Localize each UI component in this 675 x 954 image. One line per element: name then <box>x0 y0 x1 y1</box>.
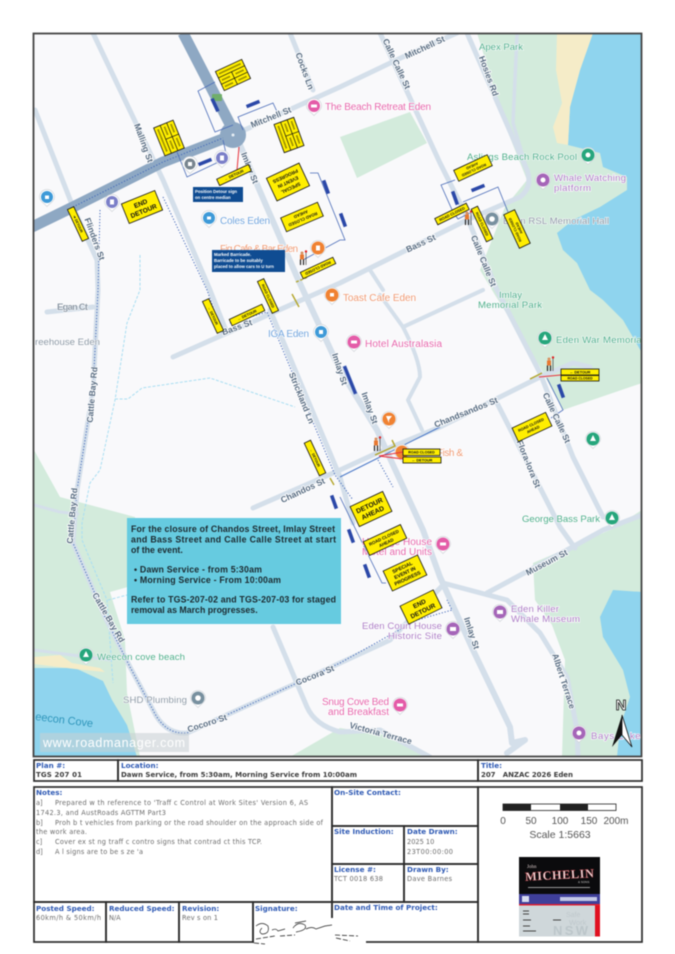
licence card: John <box>527 865 537 870</box>
place names: Apex Park <box>479 42 523 53</box>
license: TCT 0018 638 <box>333 875 383 883</box>
callout: closure information: removal as March progresses. <box>131 605 258 615</box>
place names: SHD Plumbing <box>123 695 187 706</box>
street names: Cattle Bay Rd <box>90 591 127 644</box>
sign: detour ahead: AHEAD <box>361 505 386 522</box>
drawn by: Dave Barnes <box>407 875 453 883</box>
title block: title: Title: <box>481 761 502 770</box>
scale labels: 150 <box>581 816 598 827</box>
site induction <box>332 826 404 864</box>
place names: reehouse Eden <box>35 337 100 348</box>
sign: road closed ahead south <box>363 525 407 555</box>
place names: Coles Eden <box>220 216 270 227</box>
watermark: www.roadmanager.com <box>42 736 185 750</box>
sign: detour Flinders <box>67 207 89 241</box>
place names: The Beach Retreat Eden <box>325 102 431 113</box>
street names: Calle Calle St <box>541 391 573 445</box>
sign: road closed ahead Calle Calle: ROAD CLOSED <box>461 162 487 177</box>
title block: location: Dawn Service, from 5:30am, Morning Service from 10:00am <box>121 771 357 779</box>
street names: Strickland Ln <box>287 371 317 425</box>
sign: detour Flinders: ➔ DETOUR <box>72 215 84 234</box>
sign: road closed Imlay: ROAD CLOSED <box>304 260 331 276</box>
date and time of project: Date and Time of Project: <box>334 903 438 912</box>
sign: special event in progress: EVENT IN <box>393 566 417 581</box>
sign: four-panel west <box>154 120 184 156</box>
highway shield <box>212 94 222 101</box>
scale labels: 100 <box>552 816 569 827</box>
sign: road closed ahead reversed <box>281 202 323 232</box>
revision: Revision: <box>182 904 219 913</box>
street names: Imlay St <box>330 352 350 386</box>
sign: four-panel north <box>215 59 251 91</box>
map pins <box>40 98 620 742</box>
place names: Whale Museum <box>511 614 580 625</box>
signature box <box>253 902 332 942</box>
barriers <box>292 277 542 485</box>
sign: detour Bass <box>229 304 265 326</box>
notes panel: the work area. <box>36 828 87 836</box>
street names: Chandos St <box>279 476 327 505</box>
sign: road closed ahead east: ROAD CLOSED <box>508 217 523 242</box>
sign: road closed ahead east: AHEAD <box>515 221 524 234</box>
notes panel <box>34 787 332 902</box>
sign: detour arrow Imlay: ← DETOUR <box>224 169 245 181</box>
street names: Mitchell St <box>403 34 446 61</box>
place names: Eden War Memorial <box>556 335 644 346</box>
reduced speed <box>106 902 179 942</box>
sign: road closed ahead Calle Calle east: ROAD CLOSED <box>518 417 545 433</box>
date drawn: Date Drawn: <box>407 827 458 836</box>
sign: road closed and detour, Chandos west: ← DETOUR <box>412 458 433 462</box>
sign: detour ahead: DETOUR <box>355 497 384 515</box>
signature <box>254 918 366 944</box>
note: position detour sign: Position Detour sign <box>195 189 237 194</box>
sign: special event in progress: SPECIAL <box>392 561 414 575</box>
place names: Weecon cove beach <box>97 652 185 663</box>
license: License #: <box>334 865 376 874</box>
callout: closure information: For the closure of Chandos Street, Imlay Street <box>131 524 335 534</box>
notes panel: d] <box>36 848 43 856</box>
place names: Whale Watching <box>554 173 626 184</box>
scale labels: 50 <box>525 816 537 827</box>
licence card: MICHELIN <box>525 866 594 884</box>
reduced speed: Reduced Speed: <box>109 904 175 913</box>
sign: detour and road closed, Chandos east: ← DETOUR <box>570 370 591 374</box>
sign: detour Strickland <box>304 440 326 476</box>
street names: Bass St <box>220 317 254 337</box>
scale labels: 0 <box>500 816 506 827</box>
street names: Mitchell St <box>249 104 293 130</box>
street names: Bass St <box>404 232 437 254</box>
road network <box>34 33 642 757</box>
note: position detour sign: on centre median <box>195 195 231 200</box>
notes panel: A l signs are to be s ze 'a <box>55 848 143 856</box>
scale labels: Scale 1:5663 <box>529 829 591 841</box>
notes panel: Cover ex st ng traff c contro signs that contrad ct this TCP. <box>55 838 262 846</box>
license <box>332 864 404 902</box>
north arrow: N <box>616 697 626 714</box>
north arrow <box>612 697 632 747</box>
posted speed: 60km/h & 50km/h <box>36 914 101 922</box>
highway <box>30 33 233 228</box>
traffic controllers <box>300 210 554 451</box>
title block: plan number: TGS 207 01 <box>36 771 82 779</box>
place names: Memorial Park <box>478 300 542 311</box>
posted speed: Posted Speed: <box>36 904 95 913</box>
sign: road closed Bass <box>257 279 279 313</box>
length tags <box>198 98 565 578</box>
sign: detour Bass: ← DETOUR <box>237 309 258 321</box>
title block: plan number <box>34 760 118 781</box>
water <box>34 33 642 757</box>
revision: Rev s on 1 <box>182 914 218 922</box>
place names: platform <box>554 183 591 194</box>
reduced speed: N/A <box>109 914 121 922</box>
sign: special event reversed: PROGRESS <box>271 167 299 184</box>
site induction: Site Induction: <box>334 827 394 836</box>
place names: Fish & <box>437 448 463 459</box>
sign: road closed Bass east <box>435 203 469 225</box>
sign: road closed ahead Calle Calle <box>454 155 492 181</box>
sign: special event in progress: PROGRESS <box>394 570 422 588</box>
callout: closure information: • Morning Service - From 10:00am <box>134 575 281 585</box>
detour route dotted <box>73 138 452 733</box>
map panel <box>30 33 646 757</box>
street names: Museum St <box>524 547 569 578</box>
street names: Chandsandos St <box>433 395 499 430</box>
sign: road closed ahead Calle Calle east <box>512 412 552 442</box>
drawn by: Drawn By: <box>407 865 449 874</box>
revision <box>179 902 253 942</box>
callout: closure information: Refer to TGS-207-02 and TGS-207-03 for staged <box>131 594 336 604</box>
sign: detour ahead <box>350 491 392 527</box>
date drawn: 2025 10 <box>407 838 434 846</box>
notes panel: a] <box>36 799 43 807</box>
place names: George Bass Park <box>522 514 600 525</box>
posted speed <box>34 902 106 942</box>
place names: Eden RSL Memorial Hall <box>503 216 609 227</box>
place names: Eden Killer <box>511 604 560 615</box>
scale bar <box>503 804 616 810</box>
street names: Malling St <box>132 122 156 164</box>
on-site contact: On-Site Contact: <box>334 788 401 797</box>
street names: Victoria Terrace <box>348 720 413 746</box>
sign: special event reversed: SPECIAL <box>280 180 301 195</box>
place names: Aslings Beach Rock Pool <box>467 152 577 163</box>
roundabout <box>220 122 246 148</box>
signature box: Signature: <box>255 904 298 913</box>
date drawn: 23T00:00:00 <box>407 848 453 856</box>
scale labels: 200m <box>603 816 629 827</box>
sign: four-panel east <box>274 117 304 153</box>
title block: plan number: Plan #: <box>36 761 65 770</box>
title block: title <box>478 760 642 781</box>
notes panel: 1742.3, and AustRoads AGTTM Part3 <box>36 809 166 817</box>
place names: Toast Cafe Eden <box>343 293 416 304</box>
licence card: Safe <box>566 912 581 919</box>
licence card <box>519 857 600 938</box>
place names: Imlay <box>499 290 522 301</box>
sign: end detour south <box>400 590 442 624</box>
map frame <box>34 34 642 756</box>
street names: Imlay St <box>462 616 482 650</box>
sign: road closed ahead east <box>504 210 530 248</box>
sign: special event reversed: EVENT IN <box>276 174 299 189</box>
sign: special event reversed <box>266 163 310 201</box>
sign: end detour west: DETOUR <box>130 203 158 220</box>
title block: location <box>118 760 478 781</box>
sign: end detour south: END <box>412 598 428 610</box>
place names: Snug Cove Bed <box>322 697 389 708</box>
drawn by <box>404 864 478 902</box>
sign: end detour west <box>121 191 163 223</box>
place names: Heritage House <box>362 537 432 548</box>
place names: Eden Court House <box>362 621 442 632</box>
note: marked barricade <box>212 250 285 272</box>
callout: closure information: • Dawn Service - from 5:30am <box>134 564 262 574</box>
note: marked barricade: Marked Barricade. <box>214 252 251 257</box>
sign: road closed ahead reversed: ROAD CLOSED <box>288 211 318 228</box>
scale labels <box>500 816 629 841</box>
scale panel <box>478 787 642 942</box>
sign: end detour west: END <box>133 198 149 210</box>
notes panel: c] <box>36 838 42 846</box>
sign: road closed and detour, Chandos west <box>403 449 441 463</box>
sign: special event in progress <box>383 555 427 591</box>
date drawn <box>404 826 478 864</box>
street names <box>65 34 578 746</box>
leader lines <box>177 82 563 583</box>
place names: and Breakfast <box>328 707 389 718</box>
sign: road closed ahead Calle Calle: AHEAD <box>465 161 479 170</box>
sign: end detour south: DETOUR <box>410 602 437 621</box>
sign: road closed Bass east: ROAD CLOSED <box>439 206 466 222</box>
on-site contact <box>332 787 478 826</box>
sign: road closed Calle Calle south <box>471 206 493 242</box>
sign: detour and road closed, Chandos east: ROAD CLOSED <box>567 377 593 381</box>
title block: location: Location: <box>121 761 159 770</box>
sign: road closed Bass: ROAD CLOSED <box>261 284 275 309</box>
street names: Flora-Iora St <box>515 439 543 489</box>
street names: Calle Calle St <box>381 37 413 91</box>
notes panel: b] <box>36 819 43 827</box>
place names: Hotel Australasia <box>365 339 442 350</box>
date and time of project <box>332 902 478 942</box>
street names: Cocks Ln <box>294 51 316 91</box>
callout: closure information <box>127 518 341 624</box>
place names: Egan Ct <box>57 302 89 313</box>
place names: Fig Cafe & Bar Eden <box>220 244 298 255</box>
street names: Hosies Rd <box>477 55 501 97</box>
note: marked barricade: placed to allow cars to U turn <box>214 264 274 269</box>
sign: road closed Imlay <box>300 257 336 279</box>
street names: Cattle Bay Rd <box>85 366 99 423</box>
street names: Cocora St <box>294 663 336 687</box>
sign: road closed Calle Calle south: ROAD CLOSED <box>475 212 489 237</box>
street names: Flinders St <box>83 216 107 262</box>
street names: Cocoro St <box>186 712 228 734</box>
callout: closure information: of the event. <box>131 545 183 555</box>
notes panel: Notes: <box>36 788 63 797</box>
place names <box>35 42 646 742</box>
place names: eecon Cove <box>35 711 94 730</box>
sign: road closed ahead south: ROAD CLOSED <box>368 529 400 547</box>
note: position detour sign <box>193 187 243 202</box>
place names: Historic Site <box>388 631 442 642</box>
street names: Imlay St <box>239 151 261 185</box>
place names: Bays Lakes <box>591 731 646 742</box>
street names: Calle Calle St <box>469 234 499 288</box>
sign: detour Strickland: ← DETOUR <box>309 449 321 468</box>
closure pointers <box>237 147 561 459</box>
walking tracks <box>82 255 295 683</box>
licence card: & SONS <box>578 880 589 884</box>
sign: road closed ahead reversed: AHEAD <box>293 209 309 219</box>
notes panel: Prepared w th reference to 'Traff c Control at Work Sites' Version 6, AS <box>55 799 308 807</box>
street names: Albert Terrace <box>550 652 578 710</box>
park areas <box>34 33 642 757</box>
sign: detour arrow Imlay <box>217 164 251 186</box>
sign: road closed ahead south: AHEAD <box>378 537 394 548</box>
notes panel: Proh b t vehicles from parking or the road shoulder on the approach side of <box>55 819 324 827</box>
beach sand <box>34 33 593 672</box>
sign: detour Malling <box>202 299 224 333</box>
sign: detour and road closed, Chandos east <box>561 369 599 381</box>
licence card: Work <box>569 918 587 927</box>
place names: IGA Eden <box>268 329 309 340</box>
sign: detour Malling: ← DETOUR <box>207 307 219 326</box>
place names: Motel and Units <box>362 547 432 558</box>
title block: title: 207 ANZAC 2026 Eden <box>481 771 573 779</box>
sign: road closed ahead Calle Calle east: AHEAD <box>526 425 540 434</box>
callout: closure information: and Bass Street and Calle Calle Street at start <box>131 534 336 544</box>
note: marked barricade: Barricade to be suitably <box>214 258 263 263</box>
licence card: NSW <box>553 923 589 938</box>
street names: Imlay St <box>359 391 380 425</box>
sign: road closed and detour, Chandos west: ROAD CLOSED <box>408 450 435 454</box>
street names: Cattle Bay Rd <box>65 487 79 544</box>
